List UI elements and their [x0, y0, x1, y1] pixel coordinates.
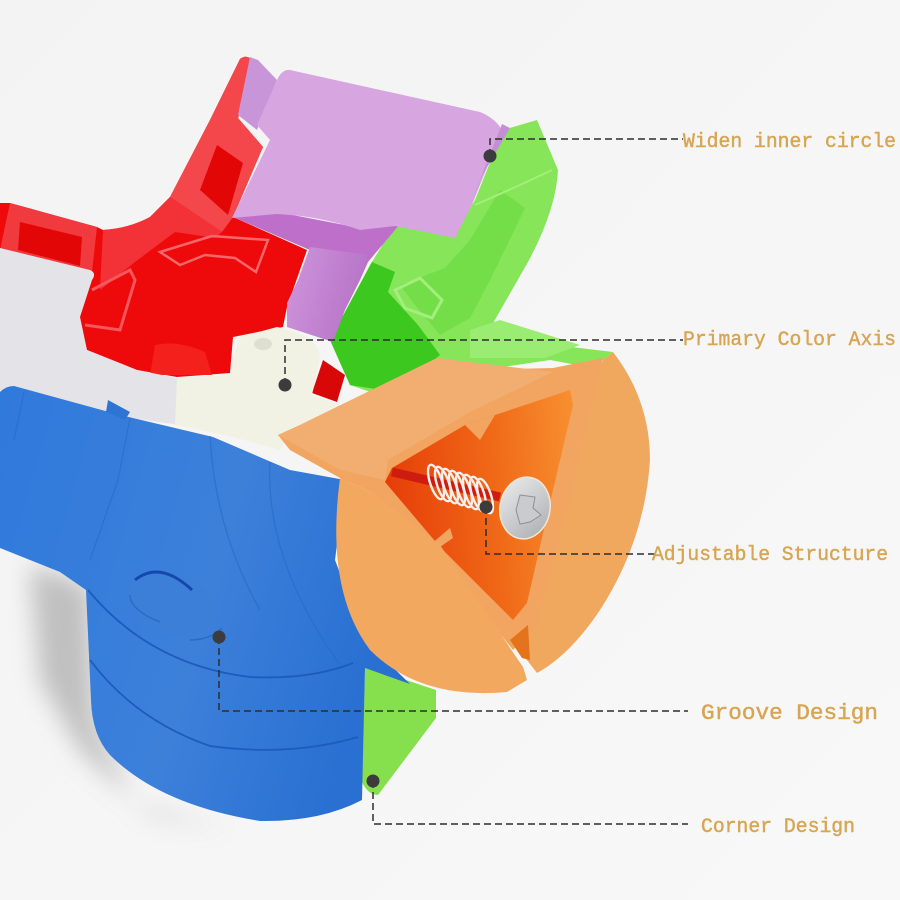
callout leader: Widen inner circle	[484, 139, 683, 162]
piece: gray-white arm	[0, 248, 180, 425]
label: Primary Color Axis: Primary Color Axis	[683, 329, 896, 352]
label: Widen inner circle: Widen inner circle	[683, 131, 896, 154]
callout leader: Corner Design	[366, 774, 688, 824]
callout leader: Primary Color Axis	[278, 340, 683, 392]
piece: cream core axis	[175, 327, 355, 450]
cast shadow	[30, 565, 230, 830]
label: Adjustable Structure: Adjustable Structure	[652, 544, 888, 567]
piece: purple face with axis stem	[232, 57, 510, 342]
label: Groove Design: Groove Design	[701, 701, 878, 726]
inner cavity	[385, 390, 573, 620]
label: Corner Design: Corner Design	[701, 816, 855, 839]
icon: oval groove	[118, 556, 226, 650]
piece: blue face	[0, 386, 410, 821]
piece: orange open corner	[278, 352, 650, 693]
callout leader: Adjustable Structure	[480, 500, 655, 554]
piece: red face	[0, 57, 307, 377]
piece: green face	[312, 120, 613, 402]
piece: green corner	[362, 668, 436, 795]
callout leader: Groove Design	[212, 630, 688, 711]
icon: spring and screw	[392, 463, 555, 543]
